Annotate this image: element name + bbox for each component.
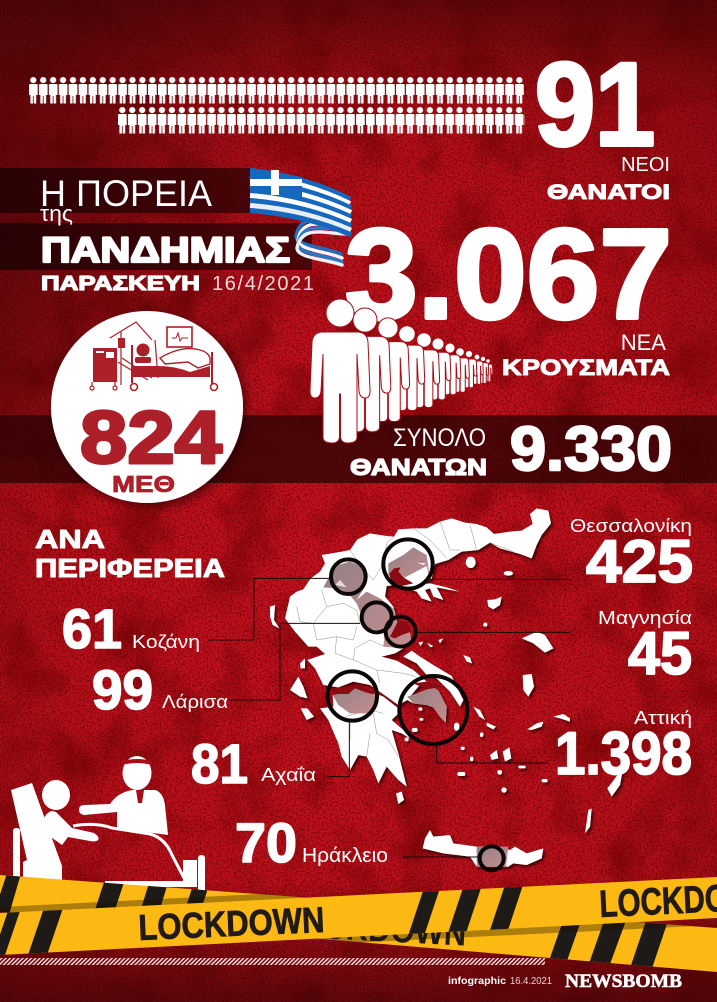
map: highlight rings (328, 539, 504, 870)
right region labels (555, 516, 693, 787)
tape stripes: front (0, 885, 523, 958)
panel: ICU count circle: 824 (80, 396, 222, 479)
title text: Η ΠΟΡΕΙΑ (40, 173, 212, 214)
title text: ΠΑΝΔΗΜΙΑΣ (41, 231, 290, 270)
stat: total deaths 9.330: ΘΑΝΑΤΩΝ (350, 454, 487, 480)
lockdown tape: back (0, 875, 717, 972)
stat: 91 new deaths: 91 (535, 39, 655, 171)
map: connector lines (208, 578, 570, 857)
credits: 16.4.2021 (510, 976, 552, 987)
tape shadow (2, 894, 694, 942)
heading: by region: ΠΕΡΙΦΕΡΕΙΑ (35, 553, 225, 583)
heading: by region: ΑΝΑ (35, 524, 105, 554)
stat: 91 new deaths: ΘΑΝΑΤΟΙ (547, 181, 670, 204)
stat: total deaths 9.330 (350, 415, 672, 484)
title text: 16/4/2021 (212, 273, 314, 295)
left region labels (62, 597, 388, 874)
label: Achaia: 81 (191, 732, 248, 795)
icon: greek flag ribbon (250, 168, 351, 265)
icon: queue of people (310, 299, 493, 443)
credits: NEWSBOMB (565, 971, 682, 992)
panel: ICU count circle: ΜΕΘ (112, 471, 175, 497)
tape text: front (140, 884, 717, 940)
label: Larissa: Λάρισα (162, 692, 228, 712)
label: Magnesia (598, 608, 692, 687)
label: Kozani: 61 (62, 597, 122, 660)
label: Magnesia: 45 (628, 620, 692, 687)
label: Attica: 1.398 (555, 720, 692, 787)
label: Achaia: Αχαΐα (261, 765, 316, 785)
stat: 3.067 new cases: ΝΕΑ (621, 330, 666, 355)
title bands (0, 168, 312, 270)
stat: total deaths 9.330: 9.330 (510, 415, 672, 484)
label: Thessaloniki: 425 (586, 528, 693, 595)
map: land masses (270, 508, 623, 867)
map: prefecture borders (297, 522, 513, 757)
label: Achaia (191, 732, 316, 795)
label: Magnesia: Μαγνησία (598, 608, 692, 628)
label: Thessaloniki (570, 516, 693, 595)
title text: της (40, 201, 73, 226)
panel: ICU count circle (51, 311, 243, 503)
stat: 3.067 new cases: ΚΡΟΥΣΜΑΤΑ (502, 355, 670, 380)
credits (448, 971, 682, 992)
map of Greece (208, 508, 623, 870)
credits: infographic (448, 975, 506, 987)
icon: doctor and patient (11, 756, 205, 893)
label: Kozani: Κοζάνη (132, 632, 200, 652)
label: Larissa (92, 658, 228, 721)
map: dark gulfs (308, 567, 450, 695)
label: Attica: Αττική (634, 708, 692, 728)
stat: 91 new deaths: ΝΕΟΙ (621, 154, 670, 176)
title text (40, 173, 314, 295)
hatched stripe (0, 958, 545, 965)
tape text: back: LOCKDOWN (280, 903, 467, 954)
label: Thessaloniki: Θεσσαλονίκη (570, 516, 692, 536)
map: highlighted regions (323, 547, 508, 867)
label: Larissa: 99 (92, 658, 153, 721)
tape stripes: back (0, 876, 667, 967)
label: Kozani (62, 597, 200, 660)
icon: ICU bed and equipment (90, 322, 218, 390)
heading: by region (35, 524, 225, 583)
label: Heraklion: Ηράκλειο (302, 845, 388, 867)
pictogram rows: 91 new deaths (29, 77, 525, 134)
label: Heraklion: 70 (235, 811, 297, 874)
stat: total deaths 9.330: ΣΥΝΟΛΟ (393, 424, 486, 452)
map: white inner details (335, 563, 429, 587)
stat: 3.067 new cases: 3.067 (345, 203, 672, 346)
lockdown tape: front (0, 875, 717, 958)
tape text: front: LOCKDOWN (138, 899, 325, 948)
title text: ΠΑΡΑΣΚΕΥΗ (41, 273, 200, 295)
label: Heraklion (235, 811, 388, 874)
band: total deaths (0, 415, 717, 483)
